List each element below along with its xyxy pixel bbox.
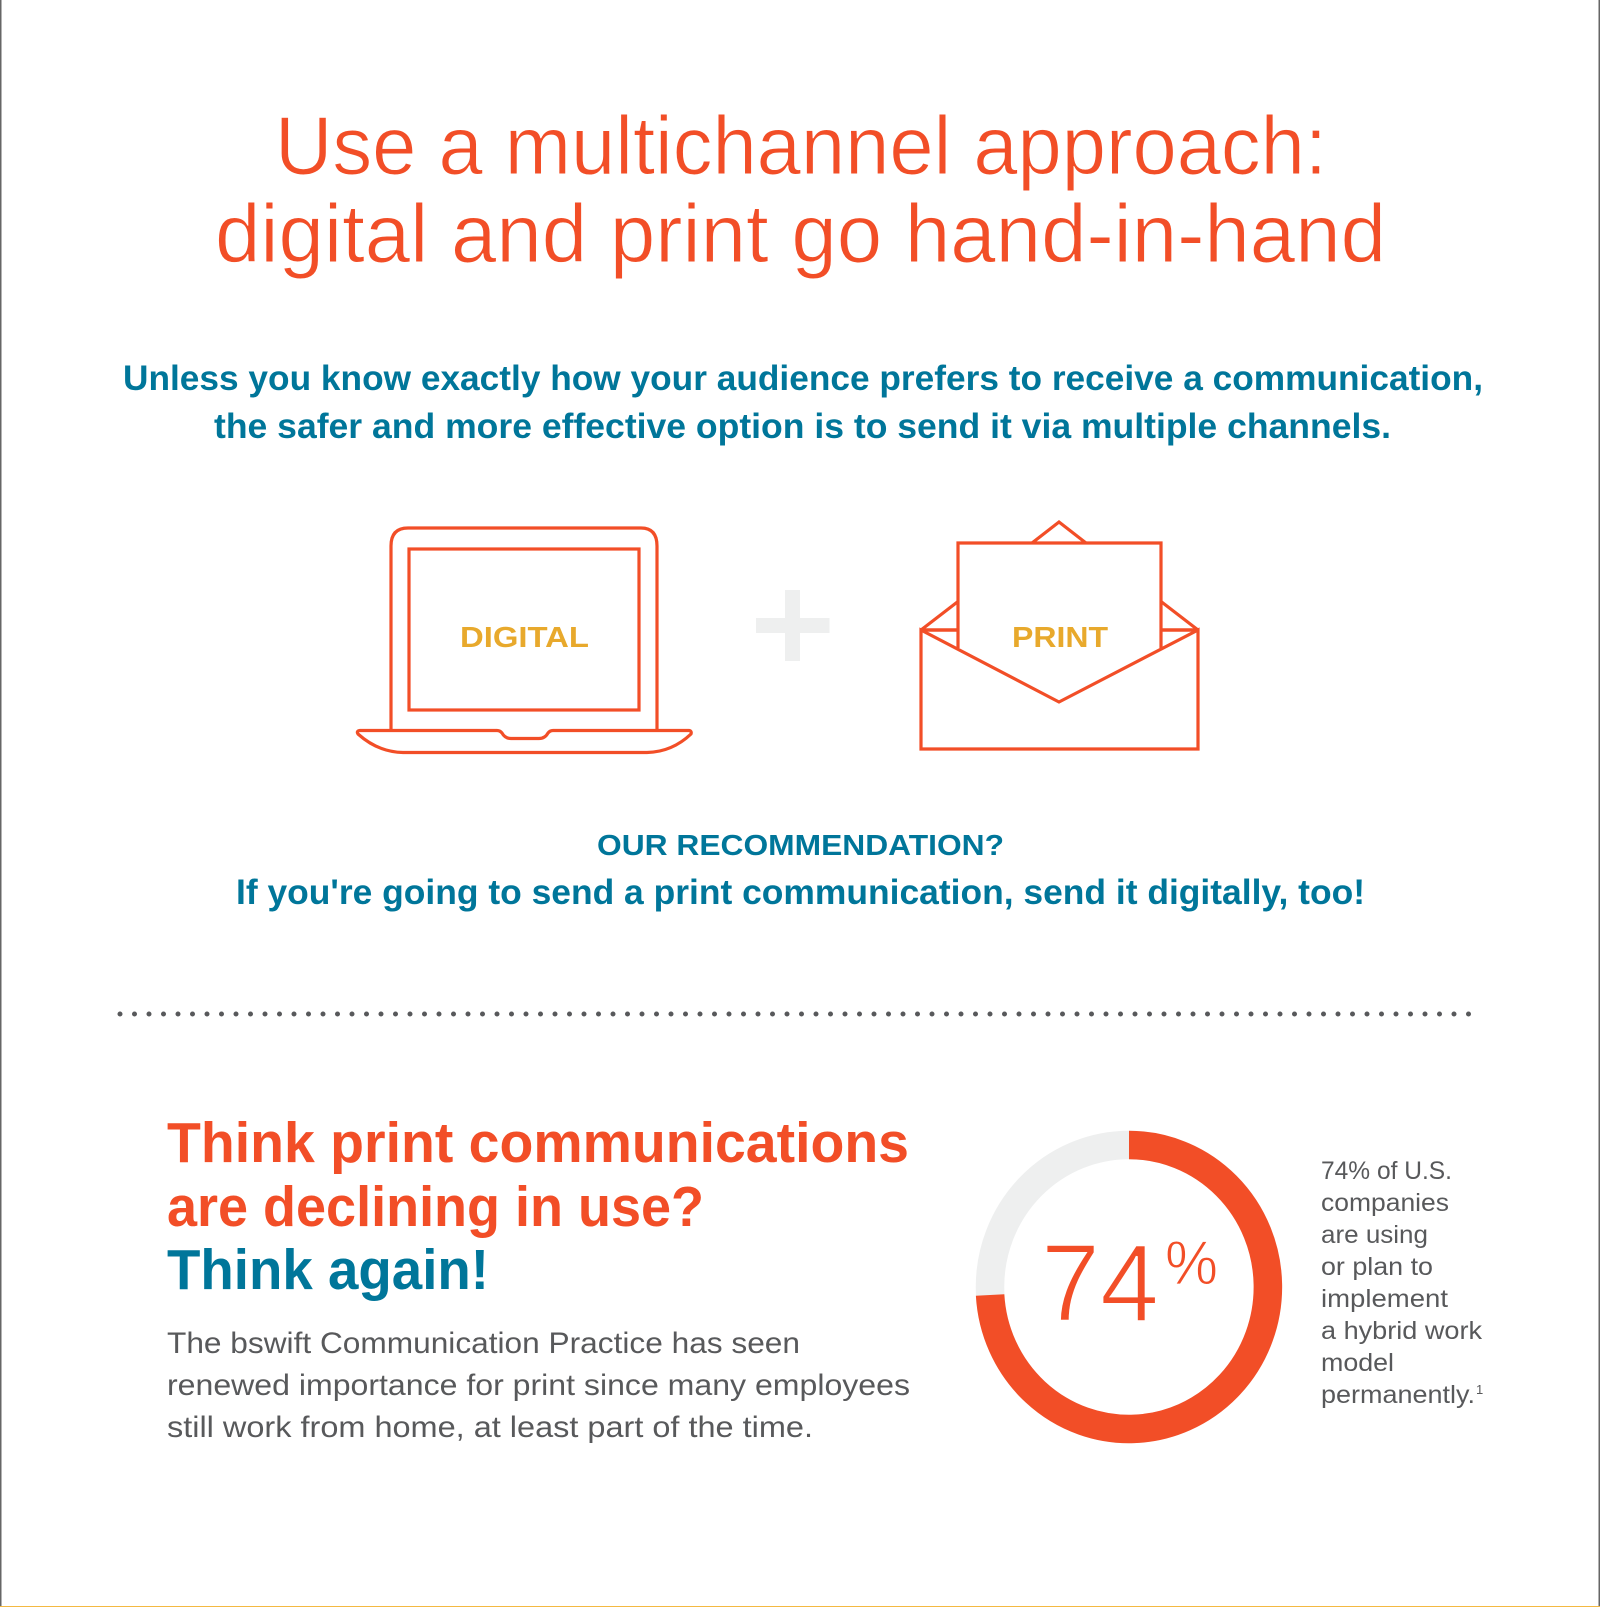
intro text: Unless you know exactly how your audience prefers to receive a communication, bbox=[123, 359, 1483, 398]
icon: plus bbox=[756, 590, 830, 661]
recommendation bbox=[236, 830, 1365, 912]
icon: envelope with letter bbox=[921, 522, 1198, 749]
intro text bbox=[123, 359, 1483, 446]
heading: think again: Think again! bbox=[167, 1238, 489, 1302]
side note bbox=[1321, 1157, 1483, 1409]
icon: laptop bbox=[357, 528, 691, 752]
body text: renewed importance for print since many employees bbox=[167, 1369, 910, 1402]
label: print: PRINT bbox=[1012, 622, 1108, 654]
side note: permanently. bbox=[1321, 1381, 1475, 1409]
value: percent sign: % bbox=[1165, 1229, 1218, 1298]
heading: think again: are declining in use? bbox=[167, 1175, 704, 1239]
title bbox=[215, 99, 1386, 280]
title: Use a multichannel approach: bbox=[275, 99, 1327, 192]
side note: a hybrid work bbox=[1321, 1317, 1483, 1345]
label: digital: DIGITAL bbox=[460, 622, 589, 654]
side note: or plan to bbox=[1321, 1253, 1433, 1281]
title: digital and print go hand-in-hand bbox=[215, 187, 1386, 280]
body text bbox=[167, 1327, 910, 1444]
body text: still work from home, at least part of the time. bbox=[167, 1411, 813, 1444]
body text: The bswift Communication Practice has seen bbox=[167, 1327, 800, 1360]
side note: 1 bbox=[1476, 1382, 1483, 1397]
side note: companies bbox=[1321, 1189, 1449, 1217]
donut chart: 74% bbox=[990, 1145, 1268, 1429]
side note: are using bbox=[1321, 1221, 1428, 1249]
recommendation: OUR RECOMMENDATION? bbox=[597, 830, 1004, 862]
heading: think again: Think print communications bbox=[167, 1111, 909, 1175]
side note: model bbox=[1321, 1349, 1394, 1377]
heading: think again bbox=[167, 1111, 909, 1302]
value: 74: 74 bbox=[1041, 1222, 1159, 1345]
side note: implement bbox=[1321, 1285, 1448, 1313]
recommendation: If you're going to send a print communication, send it digitally, too! bbox=[236, 873, 1365, 912]
intro text: the safer and more effective option is to send it via multiple channels. bbox=[214, 407, 1391, 446]
side note: 74% of U.S. bbox=[1321, 1157, 1452, 1185]
